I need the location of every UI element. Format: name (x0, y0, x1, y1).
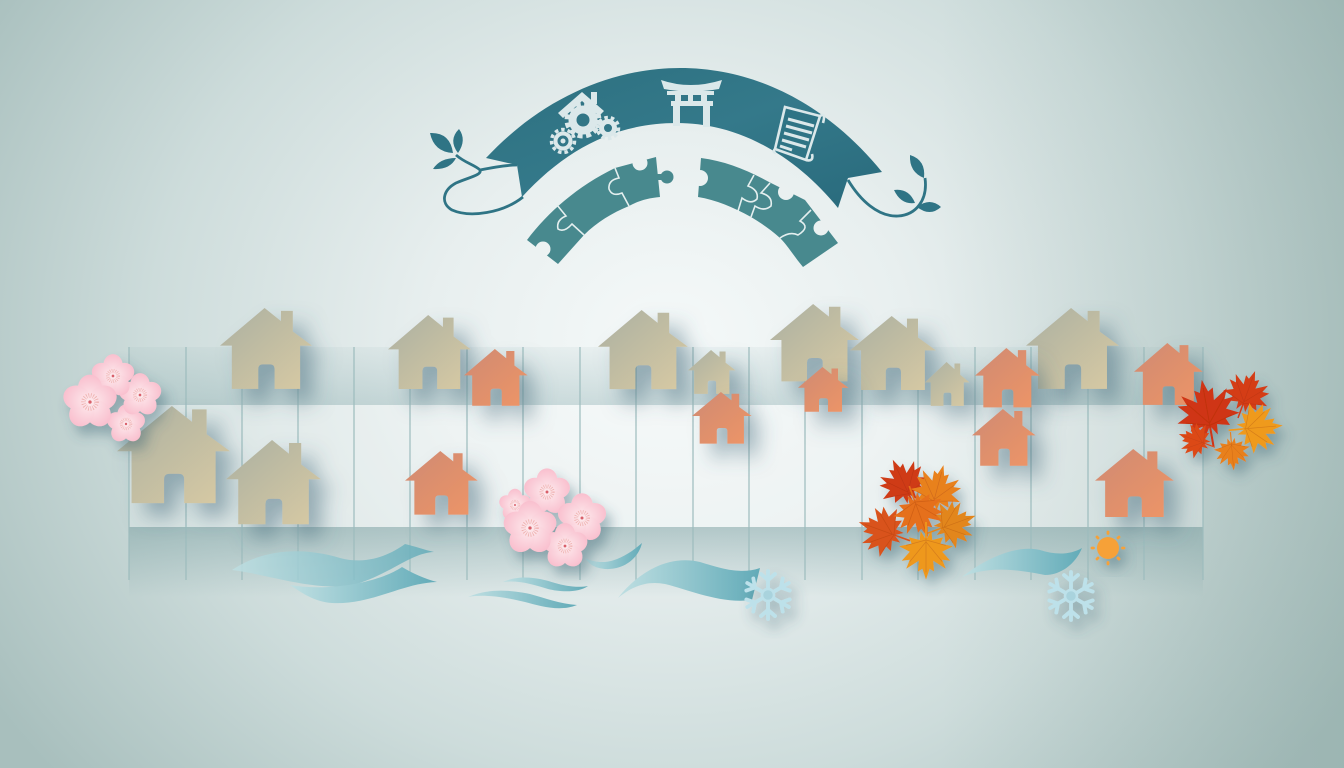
snowflake centre (744, 571, 792, 619)
puzzle seams right (738, 175, 811, 238)
vine right with leaves (848, 155, 941, 216)
wave right (962, 548, 1082, 577)
banner: curved ribbon with icons (486, 68, 882, 208)
icon: torii gate (661, 80, 722, 127)
maple leaves cluster centre (850, 449, 984, 580)
panel: timeline grid with three bands (129, 347, 1203, 597)
cherry blossoms centre (497, 468, 609, 571)
ribbon (486, 68, 882, 208)
puzzle arc left (527, 157, 674, 264)
icon: house with gears (552, 92, 618, 152)
wave centre right (618, 560, 760, 601)
icon: sun (1092, 532, 1124, 564)
icon: scroll document (774, 107, 824, 160)
top band (129, 347, 1203, 405)
snowflake right (1047, 572, 1095, 620)
bottom band (129, 527, 1203, 597)
middle band (129, 405, 1203, 527)
vine left with leaves (430, 129, 523, 214)
small waves centre (468, 543, 642, 608)
puzzle seams left (557, 168, 629, 235)
puzzle arc right (698, 158, 838, 267)
orange houses (405, 343, 1203, 517)
tan houses (117, 304, 1119, 524)
waves left (232, 544, 437, 603)
cherry blossoms left (60, 354, 164, 445)
maple leaves cluster right (1171, 363, 1285, 472)
